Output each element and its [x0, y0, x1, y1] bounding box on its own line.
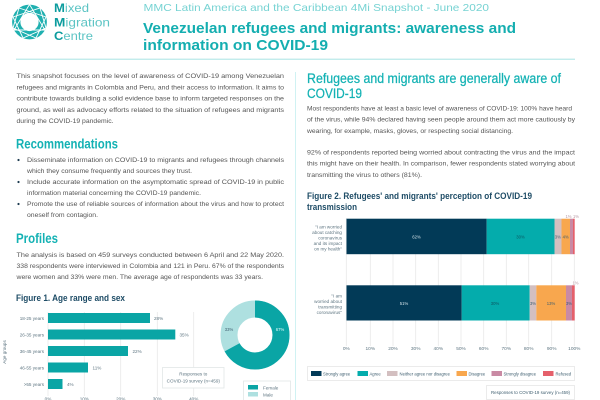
percentage axis: 30%	[411, 346, 421, 352]
note: responses figure 2: Responses to COVID-19 survey (n=459)	[491, 390, 571, 395]
bar chart: age range: 36-45 years	[20, 349, 45, 354]
bar: worried about transmitting coronavirus: 30%	[491, 301, 499, 306]
logo: Mixed Migration Centre: Mixed	[54, 1, 89, 15]
percentage axis: 90%	[547, 346, 557, 352]
bar: worried about catching coronavirus: 1%	[573, 214, 579, 219]
intro text block: This snapshot focuses on the level of awareness of COVID-19 among Venezuelan	[16, 73, 284, 80]
percentage axis: 50%	[456, 346, 467, 352]
bar: worried about transmitting coronavirus: 13%	[547, 301, 555, 306]
main title	[143, 20, 516, 54]
bar chart: age range	[2, 312, 198, 400]
bar: worried about catching coronavirus: 30%	[516, 234, 525, 240]
bar chart: age range: 46-55 years	[20, 366, 45, 370]
percentage axis: 20%	[388, 346, 399, 352]
percentage axis: 40%	[433, 346, 444, 352]
bar chart: age range: 4%	[67, 382, 74, 387]
statement labels: on my health"	[314, 246, 342, 252]
profiles text block	[15, 252, 285, 281]
bar: worried about catching coronavirus: 62%	[412, 234, 421, 240]
heading: Profiles: Profiles	[16, 231, 58, 246]
bar: worried about catching coronavirus	[346, 214, 579, 254]
donut chart: sex	[225, 309, 284, 361]
legend: agreement scale	[308, 366, 574, 380]
heading: Recommendations: Recommendations	[16, 136, 118, 152]
percentage axis: 10%	[365, 346, 376, 352]
figure 1 title: Figure 1. Age range and sex	[16, 293, 125, 303]
recommendations list	[17, 157, 285, 219]
legend: sex	[244, 381, 290, 400]
intro text block: ground, as well as advocacy efforts related to the situation of refugees and migrants	[16, 107, 285, 114]
legend: sex: Female	[263, 386, 279, 390]
heading: awareness: COVID-19	[307, 86, 362, 101]
intro text block: contribute towards building a solid evidence base to inform targeted responses on the	[16, 96, 284, 103]
logo: Mixed Migration Centre: Migration	[54, 16, 110, 30]
intro text block	[16, 73, 285, 125]
awareness text block: 92% of respondents reported being worried about contracting the virus and the impact	[307, 150, 575, 156]
statement labels: transmitting	[318, 304, 342, 310]
statement labels: coronavirus"	[317, 310, 342, 315]
bar: worried about catching coronavirus: 1%	[565, 214, 572, 219]
figure 2 title: Figure 2. Refugees' and migrants' perception of COVID-19	[307, 191, 532, 201]
note: responses figure 2	[486, 386, 574, 400]
statement labels	[312, 224, 343, 315]
awareness text block: Most respondents have at least a basic level of awareness of COVID-19: 100% have heard	[307, 105, 572, 112]
profiles text block: were women and 33% were men. The average age of respondents was 33 years.	[15, 274, 263, 281]
stacked bar chart: perception	[312, 214, 581, 352]
recommendations list: oneself from contagion.	[27, 212, 98, 219]
bar: worried about transmitting coronavirus: 51%	[400, 301, 408, 306]
logo: Mixed Migration Centre: Centre	[54, 29, 93, 43]
header subtitle: MMC Latin America and the Caribbean 4Mi Snapshot - June 2020	[144, 2, 489, 14]
statement labels: about catching	[312, 230, 342, 235]
percentage axis: 100%	[568, 346, 581, 352]
recommendations list: Include accurate information on the asymptomatic spread of COVID-19 in public	[27, 179, 285, 186]
bar: worried about transmitting coronavirus: 1%	[572, 280, 579, 286]
profiles text block: The analysis is based on 459 surveys conducted between 6 April and 22 May 2020.	[16, 252, 284, 259]
bar: worried about catching coronavirus: 4%	[563, 234, 569, 240]
recommendations list: Promote the use of reliable sources of information about the virus and how to protect	[27, 201, 284, 208]
bar: worried about transmitting coronavirus	[346, 280, 579, 320]
donut chart: sex: 67%	[276, 327, 284, 332]
percentage axis: 70%	[501, 346, 512, 352]
awareness text block: wearing, for example, masks, gloves, or respecting social distancing.	[306, 128, 513, 135]
intro text block: during the COVID-19 pandemic.	[16, 118, 114, 125]
recommendations list: Disseminate information on COVID-19 to migrants and refugees through channels	[27, 157, 285, 164]
donut chart: sex: 33%	[225, 327, 233, 332]
recommendations list: which they consume frequently and sources they trust.	[26, 168, 192, 175]
legend: sex: Male	[263, 392, 273, 398]
bar chart: age range: 28%	[154, 316, 163, 321]
bar chart: age range: Age groups	[2, 340, 7, 364]
bar: worried about transmitting coronavirus: 3%	[530, 301, 536, 306]
bar chart: age range: 22%	[132, 349, 142, 354]
statement labels: "I am	[331, 294, 342, 298]
main title: Venezuelan refugees and migrants: awareness and	[143, 20, 516, 37]
logo: Mixed Migration Centre	[12, 1, 110, 43]
figure 2 title: transmission	[307, 202, 357, 212]
legend: agreement scale: Disagree	[468, 371, 486, 376]
awareness text block: transmitting the virus to others (81%).	[307, 172, 422, 179]
percentage axis	[343, 346, 581, 352]
recommendations list: information material concerning the COVID-19 pandemic.	[27, 190, 201, 197]
intro text block: refugees and migrants in Colombia and Peru, and their access to information. It aims to	[16, 84, 284, 91]
statement labels: and its impact	[314, 241, 343, 246]
legend: agreement scale: Neither agree nor disagree	[400, 371, 451, 376]
awareness text block: of the virus, while 94% declared having seen people around them act more cautiously by	[307, 116, 576, 124]
note: responses figure 1	[162, 368, 224, 388]
percentage axis: 0%	[343, 346, 350, 352]
bar: worried about catching coronavirus: 3%	[555, 234, 561, 240]
note: responses figure 1: Responses to	[179, 372, 208, 376]
main title: information on COVID-19	[143, 37, 328, 54]
bar chart: age range: 26-35 years	[20, 332, 45, 338]
bar chart: age range: 11%	[92, 366, 101, 370]
statement labels: coronavirus	[318, 236, 343, 240]
profiles text block: 338 respondents were interviewed in Colombia and 121 in Peru. 67% of the respondents	[16, 263, 285, 270]
legend: agreement scale: Strongly agree	[323, 371, 351, 376]
heading: awareness	[307, 71, 561, 101]
bar: worried about transmitting coronavirus: 3%	[566, 301, 572, 306]
percentage axis: 80%	[524, 346, 534, 352]
bar chart: age range: 35%	[180, 332, 189, 338]
note: responses figure 1: COVID-19 survey (n=459)	[167, 378, 220, 384]
awareness text block: this might have on their health. In comparison, fewer respondents stated worrying about	[307, 161, 575, 168]
statement labels: "I am worried	[315, 224, 342, 230]
awareness text block	[306, 105, 576, 179]
statement labels: worried about	[314, 299, 343, 304]
bar chart: age range: 18-25 years	[20, 316, 45, 321]
legend: agreement scale: Agree	[370, 371, 381, 376]
bar chart: age range: >55 years	[24, 382, 45, 387]
heading: awareness: Refugees and migrants are generally aware of	[307, 71, 561, 86]
figure 2 title	[307, 191, 532, 212]
legend: agreement scale: Strongly disagree	[504, 371, 537, 376]
legend: agreement scale: Refused	[556, 371, 572, 376]
percentage axis: 60%	[479, 346, 489, 352]
